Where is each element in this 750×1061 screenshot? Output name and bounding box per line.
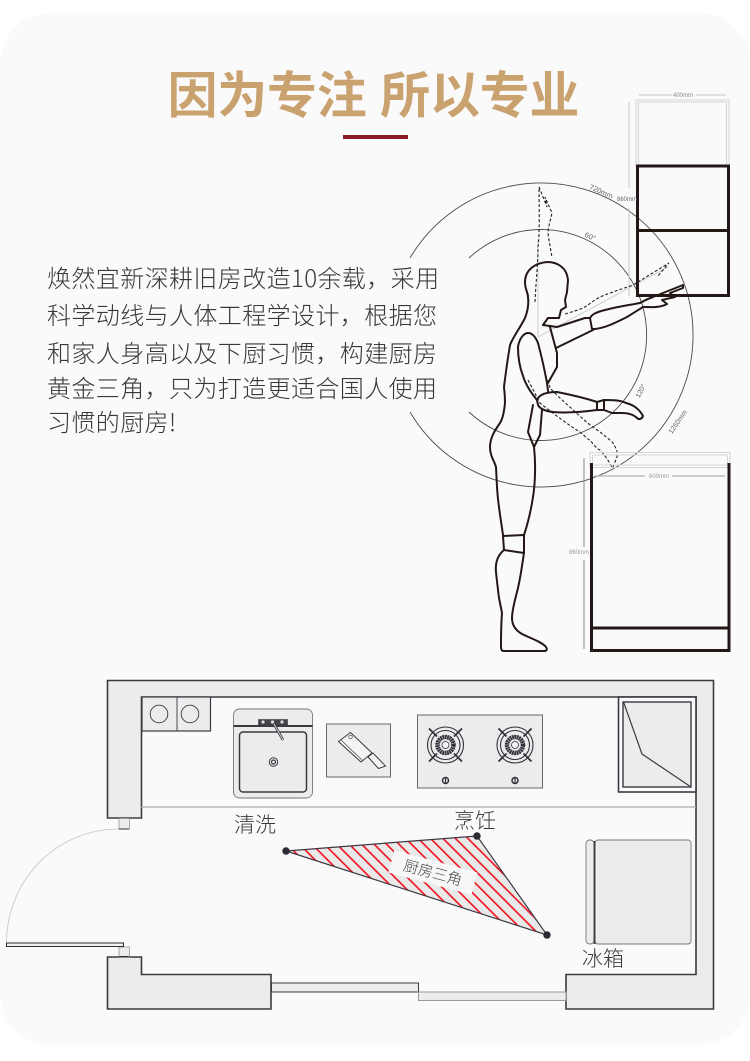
upper cabinet [638,166,728,296]
upper cabinet ghost outline [636,100,729,166]
dimension labels: 60° [583,230,597,243]
body text block [47,259,439,438]
gas stove [418,715,542,788]
dimension labels: 400mm [673,93,693,99]
body text block: 和家人身高以及下厨习惯，构建厨房 [47,334,437,369]
zone labels: 清洗 [234,814,276,837]
triangle label: 厨房三角 [401,857,464,889]
body text block: 习惯的厨房! [47,403,176,438]
kitchen work triangle [282,832,551,939]
counter edge line [141,806,696,808]
body text block: 黄金三角，只为打造更适合国人使用 [47,369,437,404]
ergonomic guide lines [538,240,668,337]
dimension labels: 860mm [569,550,589,556]
extended arm [543,285,683,329]
human figure [490,262,683,651]
dimension labels: 720mm [588,182,614,201]
fridge [586,840,691,944]
dimension labels: 120° [634,383,648,399]
zone labels: 烹饪 [454,810,496,833]
dimension labels: 600mm [649,474,669,480]
double hob appliance [142,697,210,731]
triangle nodes [282,832,551,939]
dimension labels [569,93,693,556]
stove knobs [442,778,518,784]
window [272,983,566,1000]
title accent bar [343,135,408,139]
cutting board with cleaver [326,724,390,777]
body text block: 焕然宜新深耕旧房改造10余载，采用 [47,259,439,294]
dimension: base cabinet [584,458,725,649]
knee [503,535,524,553]
zone labels: 冰箱 [582,948,624,971]
chest [548,327,557,383]
head and back [490,262,568,535]
hips and front leg [528,405,542,447]
title: 因为专注 所以专业 [168,68,579,124]
lower leg and foot [496,550,547,651]
dimension labels: 1260mm [668,409,689,435]
base cabinet ghost countertop [590,452,730,468]
left burner [428,727,464,763]
side arm [518,333,548,391]
ergonomic diagram: reach arcs [410,183,693,487]
forearm [537,392,643,419]
triangle label [388,850,477,895]
body text block: 科学动线与人体工程学设计，根据您 [47,296,437,331]
corner sink unit [618,697,696,792]
right burner [497,727,533,763]
base cabinet [592,463,729,650]
zone labels [234,810,624,971]
dimension: upper cabinet [629,95,726,296]
floor plan walls [108,680,714,1009]
dimension labels: 860mm [617,197,637,203]
dashed arm motion paths [528,187,669,467]
door [6,818,130,957]
sink [234,709,312,798]
